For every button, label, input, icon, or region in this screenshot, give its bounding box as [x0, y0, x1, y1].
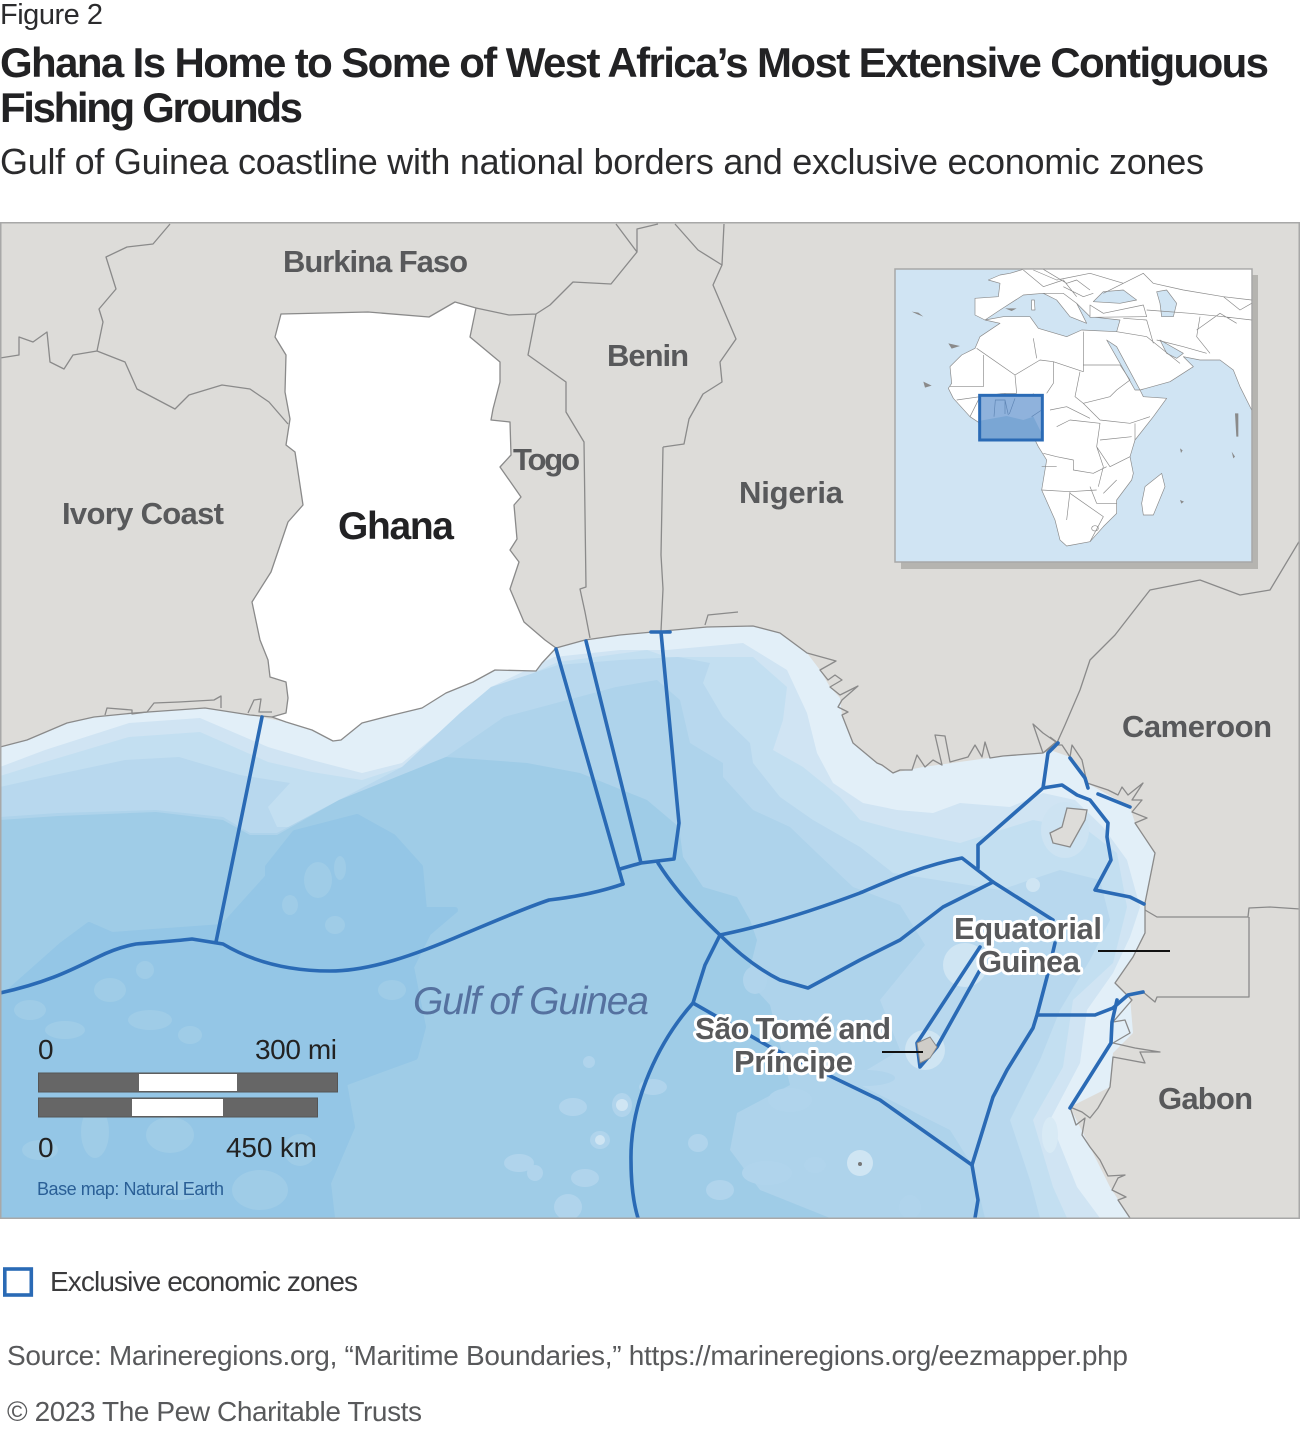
island: Bioko [1050, 808, 1087, 847]
lagoons [105, 612, 1058, 743]
label: Togo: Togo [513, 442, 580, 477]
label: Equatorial Guinea [954, 911, 1102, 979]
land [0, 222, 1300, 1218]
label: Gabon: Gabon [1158, 1081, 1253, 1116]
scale bar [38, 1034, 338, 1163]
source: Source: Marineregions.org, “Maritime Boundaries,” https://marineregions.org/eezmapper.php [7, 1340, 1128, 1371]
label: Equatorial Guinea: Equatorial [954, 911, 1102, 946]
copyright: © 2023 The Pew Charitable Trusts [7, 1396, 422, 1427]
label: Equatorial Guinea: Guinea [978, 944, 1081, 979]
label: Ghana: Ghana [338, 505, 454, 548]
scale bar: 0 [38, 1034, 54, 1065]
EEZ boundaries [0, 632, 1144, 1218]
label: São Tomé and Príncipe [695, 1011, 891, 1079]
map frame [1, 223, 1299, 1218]
subtitle: Gulf of Guinea coastline with national borders and exclusive economic zones [0, 141, 1204, 182]
legend: Exclusive economic zones [50, 1266, 358, 1297]
map panel [0, 222, 1300, 1220]
label: Cameroon: Cameroon [1122, 709, 1272, 744]
label: Benin: Benin [607, 338, 689, 373]
label: São Tomé and Príncipe: São Tomé and [695, 1011, 891, 1046]
scale bar: 300 mi [255, 1034, 337, 1065]
coastline [0, 626, 1160, 1218]
label: Gulf of Guinea: Gulf of Guinea [413, 980, 649, 1023]
label: Burkina Faso: Burkina Faso [283, 244, 468, 279]
scale bar: 0 [38, 1132, 54, 1163]
title: Ghana Is Home to Some of West Africa’s Most Extensive Contiguous [0, 39, 1269, 86]
leader line: São Tomé and Príncipe [882, 1051, 923, 1053]
label: Nigeria: Nigeria [739, 475, 844, 510]
island: São Tomé [917, 1037, 937, 1063]
scale bar: 450 km [226, 1132, 317, 1163]
base map credit: Base map: Natural Earth [37, 1179, 224, 1199]
sea depth layers [2, 626, 1154, 1218]
inset locator map [895, 269, 1258, 569]
title: Fishing Grounds [0, 84, 303, 131]
leader line: Equatorial Guinea [1098, 950, 1170, 952]
country: Ghana [252, 302, 556, 741]
label: São Tomé and Príncipe: Príncipe [734, 1044, 853, 1079]
light seabed blobs [14, 856, 406, 1210]
title [0, 39, 1269, 131]
neighbouring country borders [0, 224, 1300, 1002]
label: Ivory Coast: Ivory Coast [62, 496, 224, 531]
